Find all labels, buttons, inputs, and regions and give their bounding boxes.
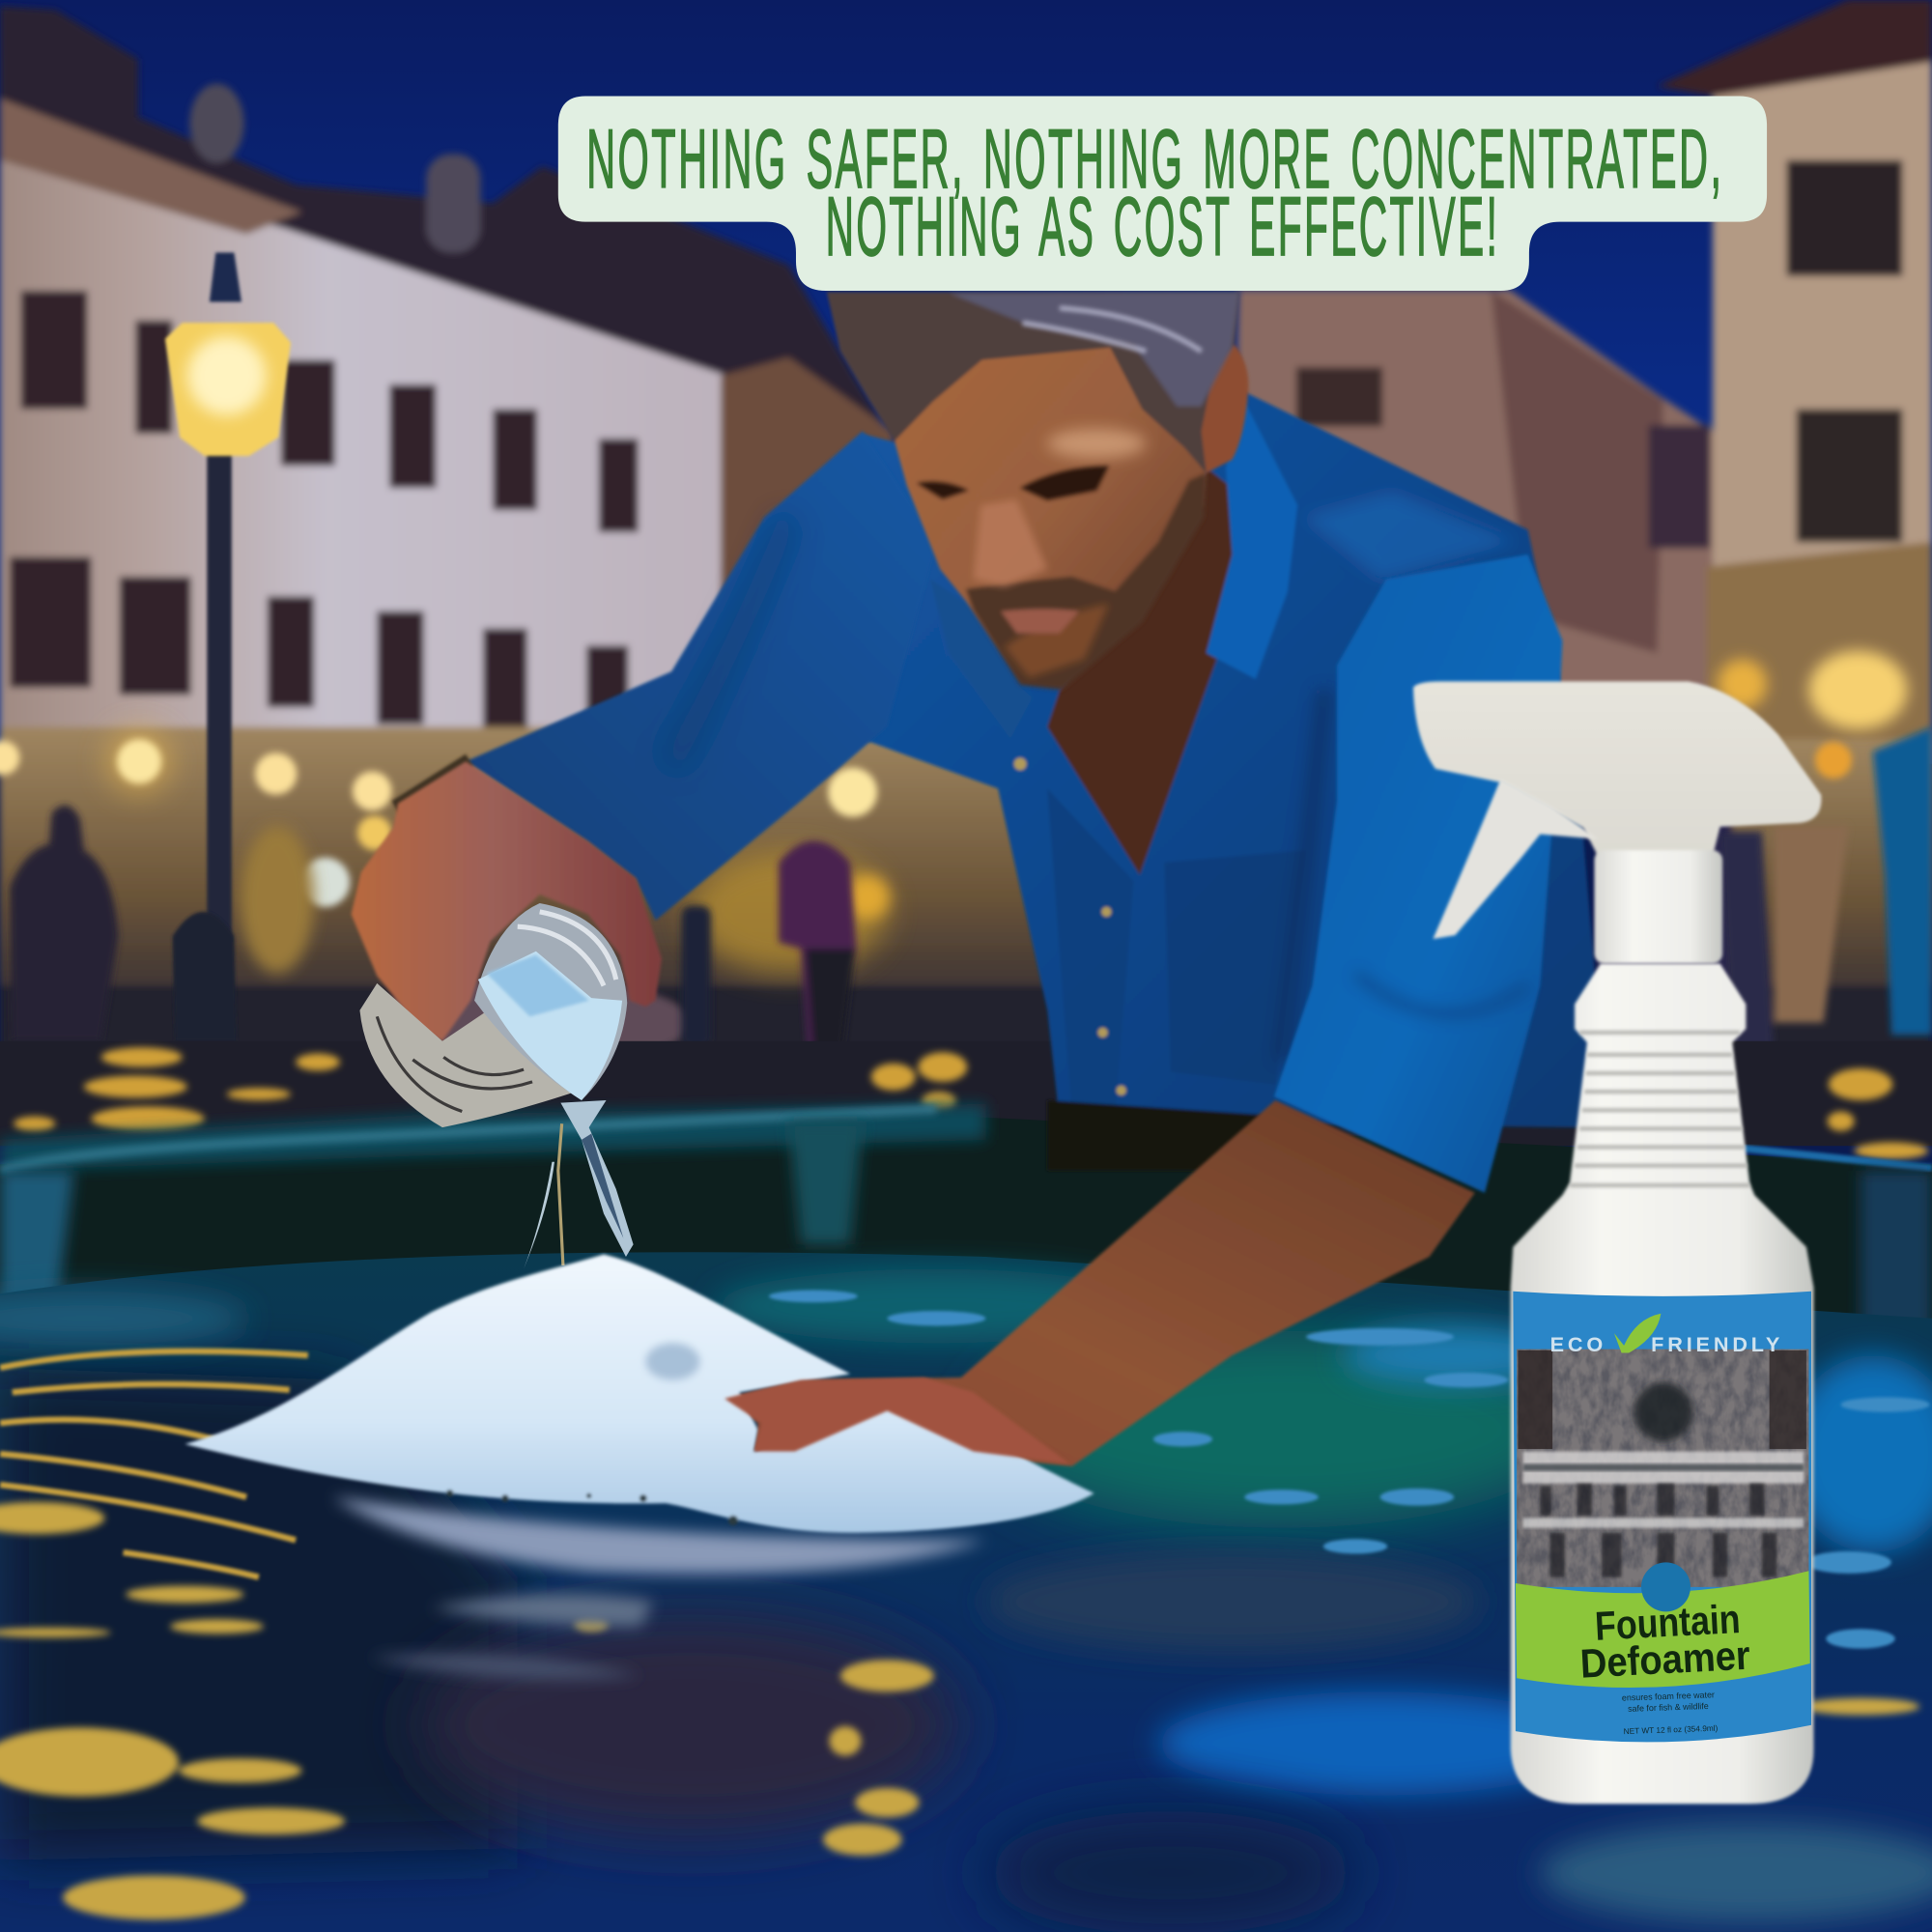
reflection of man bbox=[419, 1614, 961, 1836]
hair bbox=[827, 292, 1239, 473]
teal left rim water bbox=[0, 1292, 246, 1346]
trigger bbox=[1433, 779, 1598, 939]
dark left water bbox=[0, 1368, 518, 1861]
small label text: ensures foam free water bbox=[1622, 1690, 1715, 1703]
fountain rim top with gold reflections bbox=[0, 1041, 1932, 1159]
foam mound bbox=[185, 1254, 1094, 1533]
water stream bbox=[524, 1100, 634, 1269]
label photo bbox=[1517, 1350, 1808, 1587]
left building facade bbox=[0, 154, 727, 788]
collar right bbox=[1207, 392, 1297, 679]
hand holding glass bbox=[352, 754, 662, 1041]
rear right building bbox=[1233, 290, 1713, 690]
glass opening bbox=[474, 903, 627, 1100]
bright blue right water bbox=[1158, 1691, 1602, 1795]
ear bbox=[1198, 341, 1248, 473]
man's head bbox=[827, 292, 1248, 690]
lips bbox=[1001, 609, 1079, 634]
beard bbox=[966, 473, 1207, 690]
eyes bbox=[917, 482, 969, 499]
man's forearm and flat hand bbox=[724, 1100, 1475, 1466]
trigger sprayer head bbox=[1413, 681, 1821, 856]
label: FRIENDLY bbox=[1651, 1332, 1783, 1356]
pale foam sheen on water bbox=[332, 1497, 985, 1574]
teal centre water bbox=[985, 1331, 1577, 1528]
background people bbox=[10, 727, 1932, 1060]
liquid bbox=[478, 952, 622, 1100]
leaf icon bbox=[1614, 1314, 1661, 1353]
hand fingers on foam bbox=[724, 1378, 1069, 1463]
glass body with ribs bbox=[359, 983, 579, 1127]
hand bbox=[352, 761, 662, 1041]
man's torso in blue shirt bbox=[863, 392, 1596, 1171]
product name: Fountain bbox=[1594, 1596, 1742, 1649]
neck and chest skin bbox=[1047, 469, 1238, 875]
blue badge bbox=[1641, 1562, 1690, 1611]
gold reflections bbox=[0, 1502, 1919, 1919]
forehead highlight bbox=[1047, 429, 1146, 458]
background buildings bbox=[0, 0, 1932, 1065]
product: spray bottle bbox=[1413, 681, 1821, 1804]
glass with liquid bbox=[359, 903, 627, 1127]
water highlights bbox=[769, 1290, 1929, 1649]
label: NET WT 12 fl oz (354.9ml) bbox=[1623, 1723, 1719, 1736]
buttons bbox=[1014, 757, 1126, 1095]
icon: lamp post bbox=[165, 252, 291, 1041]
watch band bbox=[392, 754, 473, 828]
belt shadow bbox=[1047, 1100, 1269, 1171]
night sky bbox=[0, 0, 1932, 764]
shirt shadow folds bbox=[1306, 493, 1516, 579]
fountain basin wall bbox=[0, 1104, 1932, 1343]
water pool bbox=[0, 1252, 1932, 1932]
collar left bbox=[930, 579, 1033, 739]
street lights glow bbox=[0, 650, 1907, 974]
label: safe for fish & wildlife bbox=[1628, 1701, 1709, 1714]
green band bbox=[1516, 1571, 1810, 1688]
man's rolled sleeve bbox=[1274, 554, 1562, 1193]
man's pouring arm sleeve bbox=[466, 431, 936, 921]
nose highlight bbox=[974, 499, 1047, 586]
collar bbox=[1595, 850, 1722, 963]
headline banner bbox=[558, 96, 1767, 291]
ribbed neck and body bbox=[1511, 963, 1814, 1804]
left building roof bbox=[0, 6, 887, 431]
label bbox=[1513, 1292, 1811, 1742]
face bbox=[895, 314, 1207, 686]
left windows bbox=[10, 291, 639, 732]
label: Defoamer bbox=[1579, 1633, 1751, 1687]
shirt placket bbox=[1047, 788, 1133, 1115]
right building bbox=[1713, 55, 1932, 788]
chimneys bbox=[189, 84, 244, 162]
arcade ground floor bbox=[0, 727, 1047, 1035]
eco friendly text: ECO bbox=[1550, 1332, 1606, 1356]
